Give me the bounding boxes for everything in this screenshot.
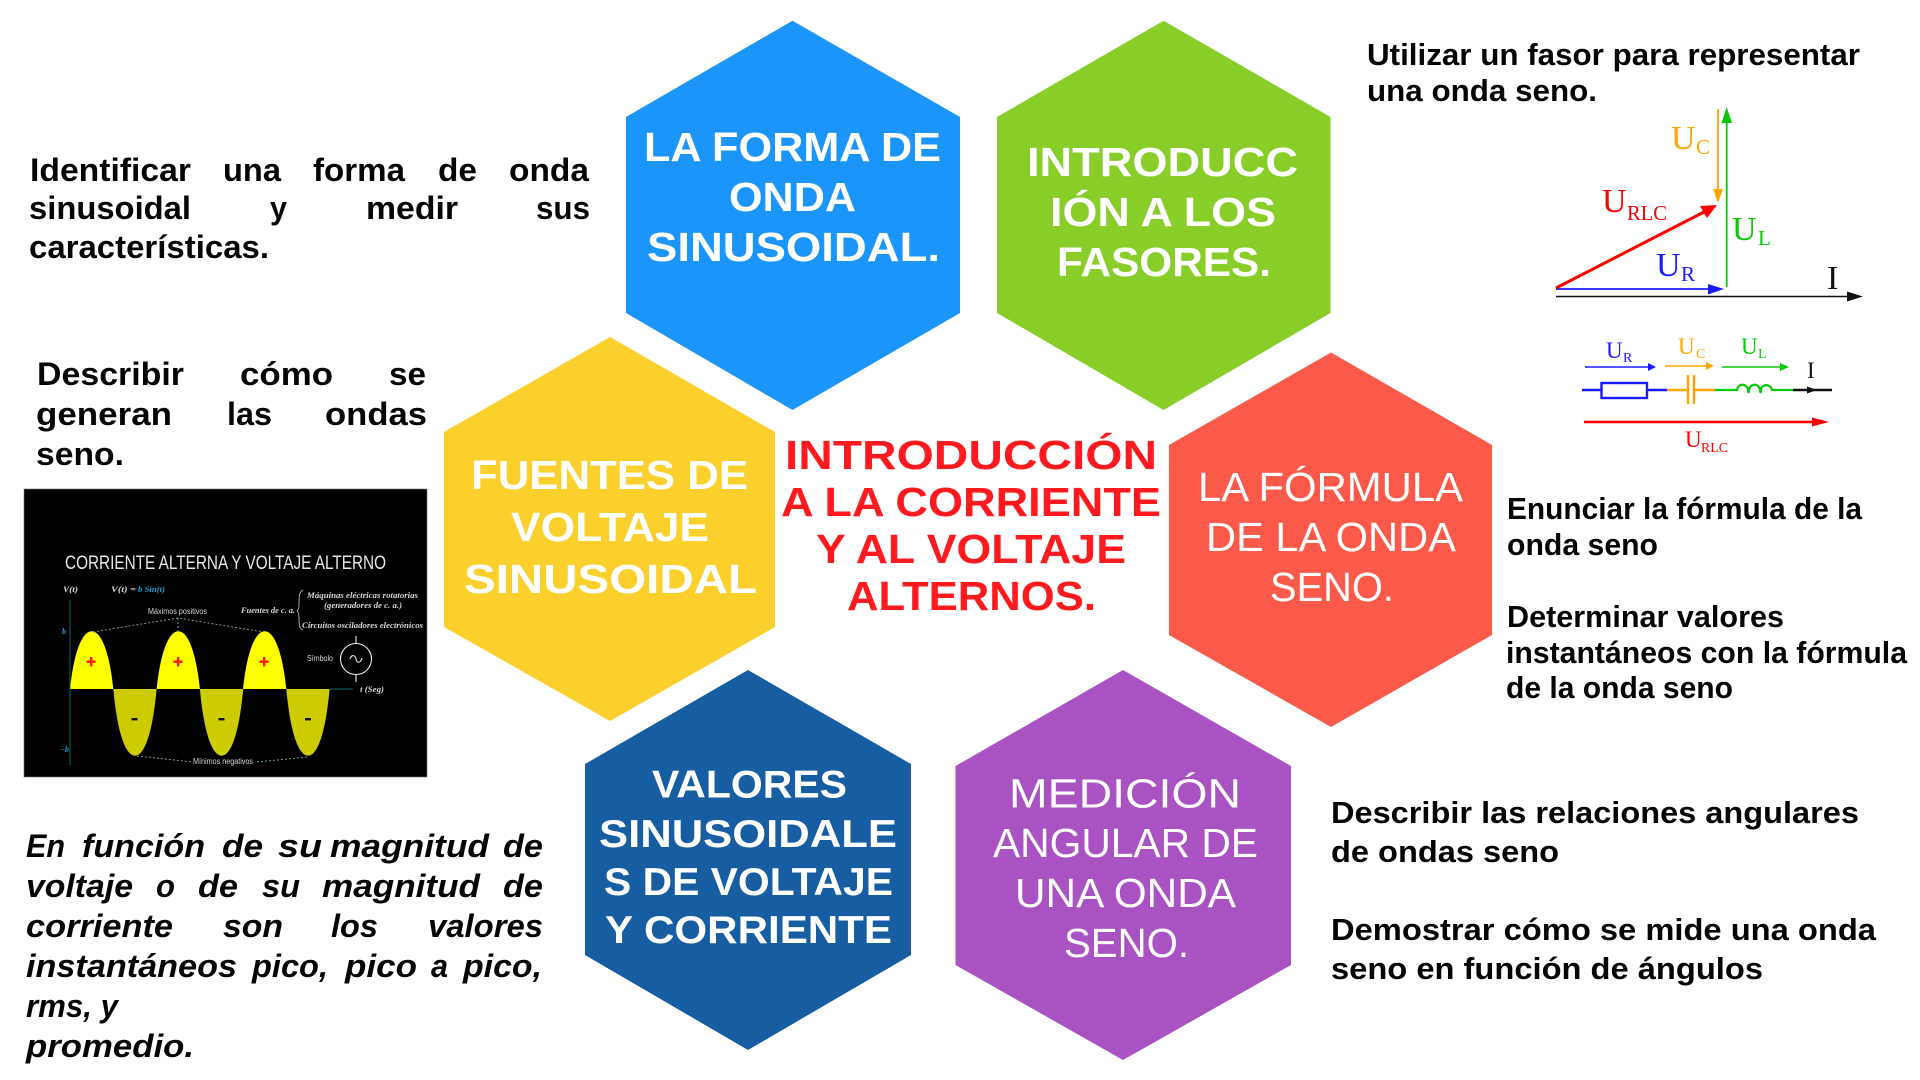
hexagon: medición angular de una onda seno bbox=[956, 670, 1291, 1060]
hexagon: valores sinusoidales de voltaje y corriente: Y CORRIENTE bbox=[605, 909, 892, 952]
text block: identificar forma de onda: sinusoidal bbox=[29, 190, 191, 226]
text block: enunciar y determinar: Enunciar la fórmula de la bbox=[1507, 491, 1863, 526]
chart: corriente alterna y voltaje alterno: Mínimos negativos bbox=[193, 757, 253, 766]
text block: describir cómo se generan: ondas bbox=[325, 396, 427, 432]
text block: enunciar y determinar: onda seno bbox=[1507, 527, 1658, 562]
text block: describir cómo se generan bbox=[36, 356, 427, 472]
text block: utilizar un fasor: Utilizar un fasor para representar bbox=[1367, 37, 1860, 72]
text block: valores instantáneos: de bbox=[503, 868, 543, 904]
hexagon: fuentes de voltaje sinusoidal: FUENTES DE bbox=[471, 452, 748, 498]
text block: describir cómo se generan: se bbox=[389, 356, 426, 392]
text block: enunciar y determinar: Determinar valores bbox=[1507, 599, 1784, 634]
diagram: RLC series circuit: I bbox=[1807, 358, 1815, 383]
text block: utilizar un fasor: una onda seno. bbox=[1367, 73, 1597, 108]
text block: valores instantáneos: voltaje bbox=[26, 868, 133, 904]
diagram: phasor diagram: U bbox=[1732, 211, 1757, 248]
hexagon: la fórmula de la onda seno bbox=[1169, 352, 1492, 727]
text block: valores instantáneos bbox=[25, 828, 543, 1064]
text block: relaciones angulares: Demostrar cómo se mide una onda bbox=[1331, 912, 1877, 947]
text block: relaciones angulares: de ondas seno bbox=[1331, 834, 1559, 869]
chart: corriente alterna y voltaje alterno: Símbolo bbox=[307, 654, 333, 663]
text block: valores instantáneos: de bbox=[198, 868, 238, 904]
hexagon: valores sinusoidales de voltaje y corriente: SINUSOIDALE bbox=[599, 813, 897, 856]
text block: identificar forma de onda: medir bbox=[366, 190, 458, 226]
hexagon: la forma de onda sinusoidal: SINUSOIDAL. bbox=[647, 224, 940, 270]
text block: identificar forma de onda: forma bbox=[313, 152, 405, 188]
hexagon: fuentes de voltaje sinusoidal bbox=[444, 337, 775, 721]
chart: corriente alterna y voltaje alterno: −b bbox=[60, 745, 69, 754]
text block: enunciar y determinar bbox=[1506, 491, 1908, 705]
diagram: RLC series circuit bbox=[1582, 334, 1832, 456]
text block: enunciar y determinar: instantáneos con la fórmula bbox=[1506, 635, 1908, 670]
diagram: phasor diagram bbox=[1556, 107, 1863, 302]
text block: valores instantáneos: magnitud bbox=[330, 828, 491, 864]
hexagon: medición angular de una onda seno: UNA ONDA bbox=[1015, 870, 1237, 916]
text block: relaciones angulares: seno en función de ángulos bbox=[1331, 951, 1763, 986]
text block: identificar forma de onda: Identificar bbox=[30, 152, 191, 188]
icon: AC source symbol bbox=[340, 636, 372, 682]
diagram: phasor diagram: C bbox=[1696, 135, 1710, 159]
text block: valores instantáneos: instantáneos bbox=[26, 948, 237, 984]
hexagon: la forma de onda sinusoidal: LA FORMA DE bbox=[644, 124, 941, 170]
text block: identificar forma de onda bbox=[29, 152, 590, 265]
diagram: RLC series circuit: U bbox=[1606, 338, 1623, 363]
text block: identificar forma de onda: onda bbox=[509, 152, 589, 188]
hexagon: medición angular de una onda seno: MEDICIÓN bbox=[1009, 770, 1241, 816]
hexagon: introducción a los fasores: FASORES. bbox=[1057, 239, 1271, 285]
diagram: phasor diagram: RLC bbox=[1627, 201, 1667, 225]
text block: valores instantáneos: de bbox=[222, 828, 263, 864]
wave: positive half cycles bbox=[70, 631, 286, 689]
text block: identificar forma de onda: una bbox=[223, 152, 281, 188]
hexagon: la fórmula de la onda seno: LA FÓRMULA bbox=[1198, 464, 1464, 510]
hexagon: la fórmula de la onda seno: SENO. bbox=[1270, 564, 1394, 610]
text block: relaciones angulares bbox=[1331, 795, 1877, 986]
chart: corriente alterna y voltaje alterno: Fuentes de c. a. bbox=[240, 606, 295, 615]
diagram: RLC series circuit: RLC bbox=[1701, 441, 1728, 456]
chart: corriente alterna y voltaje alterno: Máquinas eléctricas rotatorias bbox=[306, 591, 418, 600]
chart: corriente alterna y voltaje alterno: V(t) bbox=[63, 585, 78, 594]
diagram: phasor diagram: U bbox=[1671, 120, 1696, 157]
hexagon: valores sinusoidales de voltaje y corriente: VALORES bbox=[652, 764, 847, 806]
text block: valores instantáneos: son bbox=[223, 908, 283, 944]
text block: valores instantáneos: a bbox=[431, 948, 448, 984]
chart: corriente alterna y voltaje alterno: Circuitos osciladores electrónicos bbox=[302, 621, 423, 630]
chart: corriente alterna y voltaje alterno: b bbox=[62, 627, 66, 636]
chart: corriente alterna y voltaje alterno bbox=[24, 489, 427, 777]
text block: identificar forma de onda: y bbox=[270, 190, 287, 226]
hexagon: fuentes de voltaje sinusoidal: SINUSOIDAL bbox=[464, 556, 757, 602]
chart: corriente alterna y voltaje alterno: (generadores de c. a.) bbox=[324, 601, 402, 610]
hexagon: la fórmula de la onda seno: DE LA ONDA bbox=[1206, 514, 1457, 560]
title bbox=[781, 432, 1161, 619]
text block: describir cómo se generan: Describir bbox=[37, 356, 184, 392]
text block: valores instantáneos: de bbox=[503, 828, 543, 864]
text block: valores instantáneos: o bbox=[156, 868, 175, 904]
text block: valores instantáneos: los bbox=[331, 908, 378, 944]
hexagon: medición angular de una onda seno: ANGULAR DE bbox=[993, 820, 1258, 866]
title: Y AL VOLTAJE bbox=[816, 526, 1126, 572]
diagram: RLC series circuit: R bbox=[1623, 351, 1633, 366]
text block: describir cómo se generan: generan bbox=[36, 396, 172, 432]
text block: describir cómo se generan: seno. bbox=[36, 436, 124, 472]
hexagon: introducción a los fasores: IÓN A LOS bbox=[1050, 189, 1276, 235]
hexagon: introducción a los fasores: INTRODUCC bbox=[1027, 139, 1298, 185]
text block: valores instantáneos: su bbox=[278, 828, 322, 864]
hexagon: la forma de onda sinusoidal: ONDA bbox=[729, 174, 856, 220]
diagram: phasor diagram: R bbox=[1681, 262, 1695, 286]
text block: identificar forma de onda: características. bbox=[29, 229, 269, 265]
text block: identificar forma de onda: sus bbox=[536, 190, 590, 226]
chart: corriente alterna y voltaje alterno: V(t) = bbox=[111, 585, 137, 594]
diagram: RLC series circuit: U bbox=[1678, 334, 1695, 359]
diagram: phasor diagram: I bbox=[1827, 260, 1838, 297]
text block: valores instantáneos: pico bbox=[344, 948, 417, 984]
text block: identificar forma de onda: de bbox=[438, 152, 477, 188]
text block: valores instantáneos: valores bbox=[428, 908, 543, 944]
text block: describir cómo se generan: las bbox=[227, 396, 272, 432]
text block: valores instantáneos: pico, bbox=[462, 948, 542, 984]
text block: valores instantáneos: promedio. bbox=[25, 1028, 194, 1064]
diagram: RLC series circuit: U bbox=[1685, 427, 1702, 452]
diagram: RLC series circuit: C bbox=[1696, 347, 1705, 362]
chart: corriente alterna y voltaje alterno: t (Seg) bbox=[360, 685, 384, 694]
text block: valores instantáneos: pico, bbox=[251, 948, 328, 984]
chart: corriente alterna y voltaje alterno: Máximos positivos bbox=[148, 607, 207, 616]
text block: valores instantáneos: corriente bbox=[26, 908, 173, 944]
diagram: RLC series circuit: U bbox=[1741, 334, 1758, 359]
text block: valores instantáneos: rms, y bbox=[26, 988, 120, 1024]
title: A LA CORRIENTE bbox=[781, 479, 1161, 525]
text block: valores instantáneos: función bbox=[82, 828, 205, 864]
hexagon: valores sinusoidales de voltaje y corriente bbox=[585, 670, 911, 1050]
hexagon: introducción a los fasores bbox=[997, 21, 1330, 410]
diagram: phasor diagram: U bbox=[1602, 183, 1627, 220]
chart: corriente alterna y voltaje alterno: b Sin(t) bbox=[138, 585, 165, 594]
chart: corriente alterna y voltaje alterno: CORRIENTE ALTERNA Y VOLTAJE ALTERNO bbox=[65, 553, 386, 574]
hexagon: fuentes de voltaje sinusoidal: VOLTAJE bbox=[511, 504, 709, 550]
text block: valores instantáneos: En bbox=[26, 828, 65, 864]
title: INTRODUCCIÓN bbox=[785, 432, 1157, 478]
hexagon: valores sinusoidales de voltaje y corriente: S DE VOLTAJE bbox=[604, 861, 893, 904]
wave: negative half cycles bbox=[113, 689, 330, 756]
diagram: phasor diagram: L bbox=[1758, 226, 1771, 250]
text block: enunciar y determinar: de la onda seno bbox=[1506, 670, 1733, 705]
text block: valores instantáneos: su bbox=[262, 868, 300, 904]
text block: utilizar un fasor bbox=[1367, 37, 1860, 108]
title: ALTERNOS. bbox=[847, 573, 1096, 619]
text block: valores instantáneos: magnitud bbox=[322, 868, 482, 904]
text block: relaciones angulares: Describir las relaciones angulares bbox=[1331, 795, 1859, 830]
text block: describir cómo se generan: cómo bbox=[240, 356, 333, 392]
diagram: phasor diagram: U bbox=[1656, 247, 1681, 284]
hexagon: medición angular de una onda seno: SENO. bbox=[1064, 920, 1189, 966]
hexagon: la forma de onda sinusoidal bbox=[626, 21, 960, 410]
diagram: RLC series circuit: L bbox=[1758, 347, 1767, 362]
